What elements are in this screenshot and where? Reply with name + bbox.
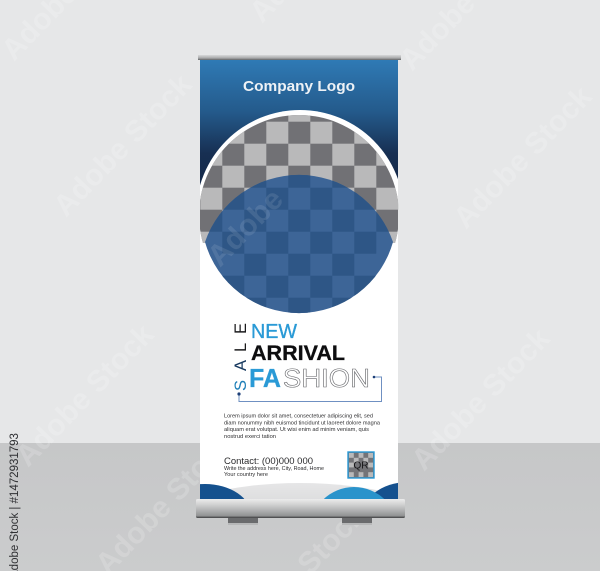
image placeholder: grey checker circle	[200, 112, 398, 243]
contact block: Contact: (00)000 000	[224, 456, 313, 467]
vertical word: sale: L	[232, 343, 250, 352]
word: fa: FA	[249, 363, 281, 393]
connector arrow	[237, 376, 382, 402]
vertical word: sale	[232, 323, 250, 391]
contact block: Your country here	[224, 472, 268, 478]
watermark: Adobe Stock	[447, 80, 599, 235]
watermark over banner: Stock	[321, 273, 402, 355]
floor	[0, 443, 600, 571]
word: shion outlined: SHION	[283, 363, 370, 393]
foot left	[228, 518, 258, 523]
image placeholder: blue checker lens	[205, 174, 393, 314]
header gradient panel	[200, 60, 398, 190]
foot right	[342, 518, 372, 523]
dark blue wave left	[200, 484, 244, 499]
white circle frame	[200, 110, 398, 190]
heading: company logo: Company Logo	[243, 78, 355, 95]
light blue wave right	[324, 487, 384, 499]
body paragraph: aliquam erat volutpat. Ut wisi enim ad minim veniam, quis	[224, 427, 369, 433]
body paragraph	[224, 414, 381, 440]
banner stand	[196, 55, 405, 525]
watermark over banner	[201, 183, 402, 355]
watermark: Adobe Stock	[9, 318, 161, 473]
roller base	[196, 499, 405, 518]
dark blue wave right	[375, 482, 398, 499]
headline block	[232, 320, 382, 402]
grey swoosh	[230, 483, 378, 499]
background wall	[0, 0, 600, 443]
bottom decorative shapes	[200, 482, 398, 499]
body paragraph: diam nonummy nibh euismod tincidunt ut laoreet dolore magna	[224, 420, 381, 426]
vertical word: sale: A	[232, 360, 250, 371]
word: arrival: ARRIVAL	[251, 342, 345, 365]
vertical word: sale: S	[232, 380, 250, 391]
watermark over banner: Adobe	[201, 183, 290, 273]
body paragraph: nostrud exerci tation	[224, 434, 276, 440]
contact block: Write the address here, City, Road, Home	[224, 466, 324, 472]
word: new: NEW	[251, 320, 298, 343]
banner sheet	[200, 60, 398, 505]
body paragraph: Lorem ipsum dolor sit amet, consectetuer adipiscing elit, sed	[224, 414, 373, 420]
qr code placeholder: QR	[354, 460, 368, 472]
contact block	[224, 456, 324, 478]
qr code placeholder	[348, 452, 374, 478]
watermark: Adobe Stock	[47, 68, 199, 223]
vertical word: sale: E	[232, 323, 250, 334]
top rail	[198, 55, 401, 60]
watermark: Adobe Stock	[405, 322, 557, 477]
